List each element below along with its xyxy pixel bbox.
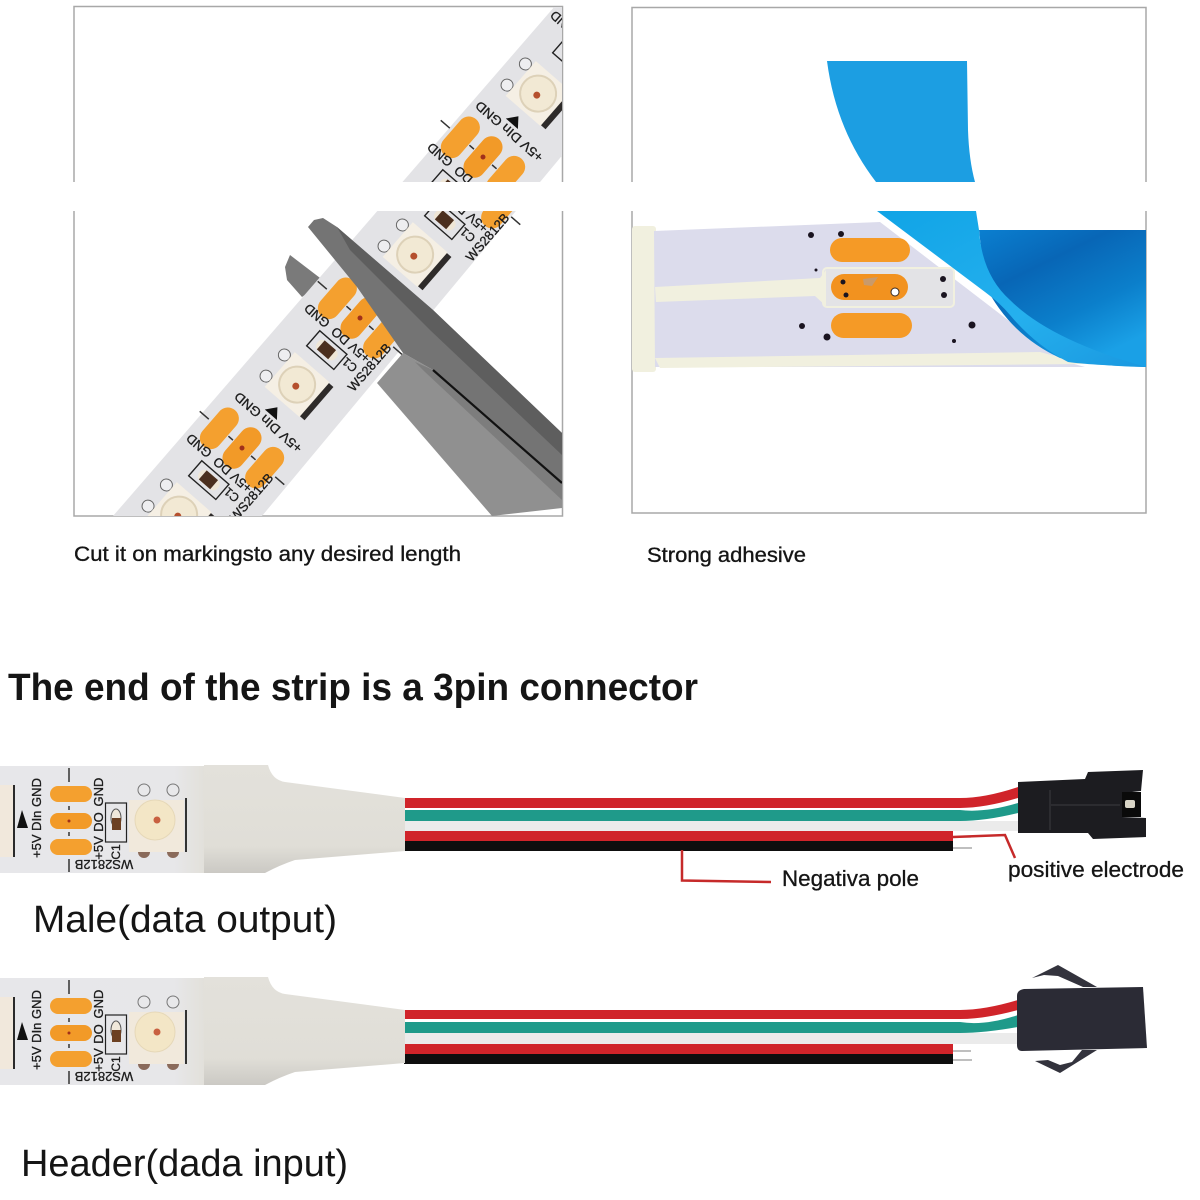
blue liner upper piece (827, 61, 975, 182)
strip segment above the break: +5V (468, 178, 496, 205)
caption: cut: Cut it on markingsto any desired length (74, 543, 461, 566)
strip end with pads and LED: +5V DIn GND (29, 990, 44, 1070)
icon: male 3-pin housing (1018, 770, 1146, 839)
strip end with pads and LED: +5V (91, 1048, 106, 1072)
strip segment above the break: DO (451, 163, 476, 187)
panel: adhesive backing photo (632, 8, 1146, 513)
strip segment above the break: GND (547, 8, 579, 38)
strip end with pads and LED: WS2812B (75, 1069, 133, 1084)
strip segments below the break: GND (419, 171, 451, 201)
strip segments below the break: WS2812B (345, 340, 394, 394)
strip segment above the break: GND (424, 140, 456, 170)
strip segments below the break: +5V DIn GND (231, 389, 305, 456)
caption: adhesive: Strong adhesive (647, 544, 806, 567)
strip segments below the break: GND (183, 431, 215, 461)
icon: female 3-pin housing (1017, 965, 1147, 1073)
strip segments below the break: +5V DIn GND (113, 519, 187, 586)
strip end with pads and LED: C1 (109, 1056, 123, 1072)
panel frame (632, 8, 1146, 513)
strip end with pads and LED: GND (91, 990, 106, 1018)
strip end with pads and LED (0, 766, 205, 873)
strip segments below the break: WS2812B (227, 470, 276, 524)
strip segments below the break: C1 (221, 484, 242, 505)
strip segments below the break: +5V (463, 209, 491, 236)
label: positive electrode: positive electrode (1008, 857, 1184, 882)
strip segments below the break: +5V DIn GND (349, 259, 423, 326)
strip end with pads and LED: C1 (109, 844, 123, 860)
strip segments below the break (113, 211, 521, 516)
strip end with pads and LED: +5V (91, 836, 106, 860)
strip segments below the break: GND (301, 301, 333, 331)
strip segments below the break: DO (446, 194, 471, 218)
strip segments below the break: C1 (339, 354, 360, 375)
blue liner peeled fold (877, 211, 1146, 367)
strip segments below the break: C1 (457, 224, 478, 245)
panel frame (74, 6, 562, 516)
wires (404, 787, 1018, 851)
icon: scissors blades (308, 218, 562, 516)
callout lines (682, 835, 1015, 882)
strip end with pads and LED: GND (91, 778, 106, 806)
strip segments below the break: DO (210, 454, 235, 478)
header connector assembly (0, 965, 1147, 1085)
strip segments below the break: +5V (345, 339, 373, 366)
wires (404, 1000, 1018, 1064)
strip end with pads and LED (0, 978, 205, 1085)
icon: scissors rear blade tip (285, 255, 324, 297)
strip end with pads and LED: DO (91, 1024, 106, 1044)
label: male: Male(data output) (33, 899, 337, 941)
strip segments below the break: DO (328, 324, 353, 348)
panel: cut strip photo (73, 6, 564, 517)
strip segment above the break: WS2812B (468, 179, 517, 233)
strip segment above the break: +5V DIn GND (472, 98, 546, 165)
strip end with pads and LED: DO (91, 812, 106, 832)
molded boot (204, 765, 405, 873)
strip segments below the break: WS2812B (463, 210, 512, 264)
strip segment above the break (402, 7, 562, 182)
strip segment above the break: C1 (462, 193, 483, 214)
label: header: Header(dada input) (21, 1143, 348, 1185)
strip backing with solder pads (632, 222, 1085, 372)
strip end with pads and LED: +5V DIn GND (29, 778, 44, 858)
molded boot (204, 977, 405, 1085)
strip segments below the break: +5V (227, 469, 255, 496)
label: negative pole: Negativa pole (782, 866, 919, 891)
male connector assembly (0, 765, 1146, 882)
strip end with pads and LED: WS2812B (75, 857, 133, 872)
heading: The end of the strip is a 3pin connector (8, 667, 698, 709)
